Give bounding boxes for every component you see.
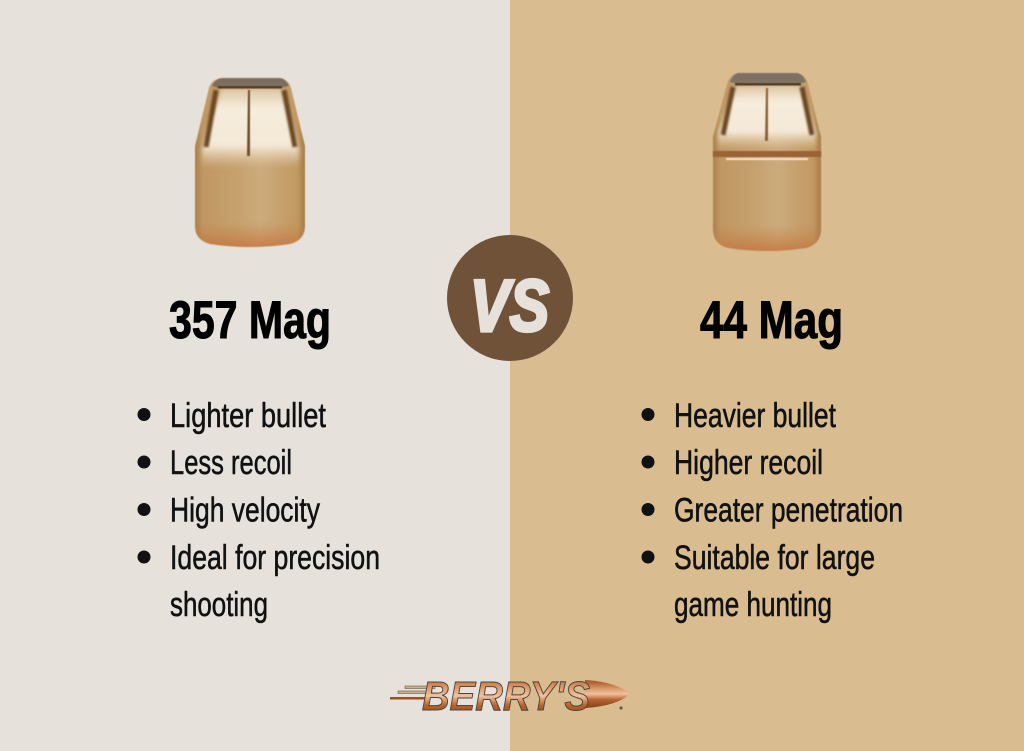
list: 44 Mag features [642, 397, 903, 624]
heading: 357 Mag: 357 Mag [169, 291, 331, 350]
list: 44 Mag features: Suitable for large [674, 539, 875, 577]
panel: 44 Mag background [510, 0, 1024, 751]
badge: VS [447, 235, 573, 361]
logo: Berry's: BERRY'S [422, 673, 590, 719]
list: 357 Mag features: High velocity [170, 492, 320, 530]
list: 44 Mag features: Greater penetration [674, 492, 903, 530]
list: 44 Mag features: Higher recoil [674, 444, 823, 482]
list: 357 Mag features: Lighter bullet [170, 397, 326, 435]
list: 357 Mag features: Less recoil [170, 444, 292, 482]
heading: 44 Mag: 44 Mag [700, 291, 843, 350]
VS text: VS [470, 266, 549, 347]
list: 357 Mag features [138, 397, 380, 624]
list: 357 Mag features: shooting [170, 586, 268, 624]
list: 357 Mag features: Ideal for precision [170, 539, 380, 577]
panel: 357 Mag background [0, 0, 510, 751]
icon: 357 Mag bullet [195, 78, 305, 247]
icon: 44 Mag bullet [713, 73, 821, 251]
list: 44 Mag features: game hunting [674, 586, 832, 624]
list: 44 Mag features: Heavier bullet [674, 397, 836, 435]
